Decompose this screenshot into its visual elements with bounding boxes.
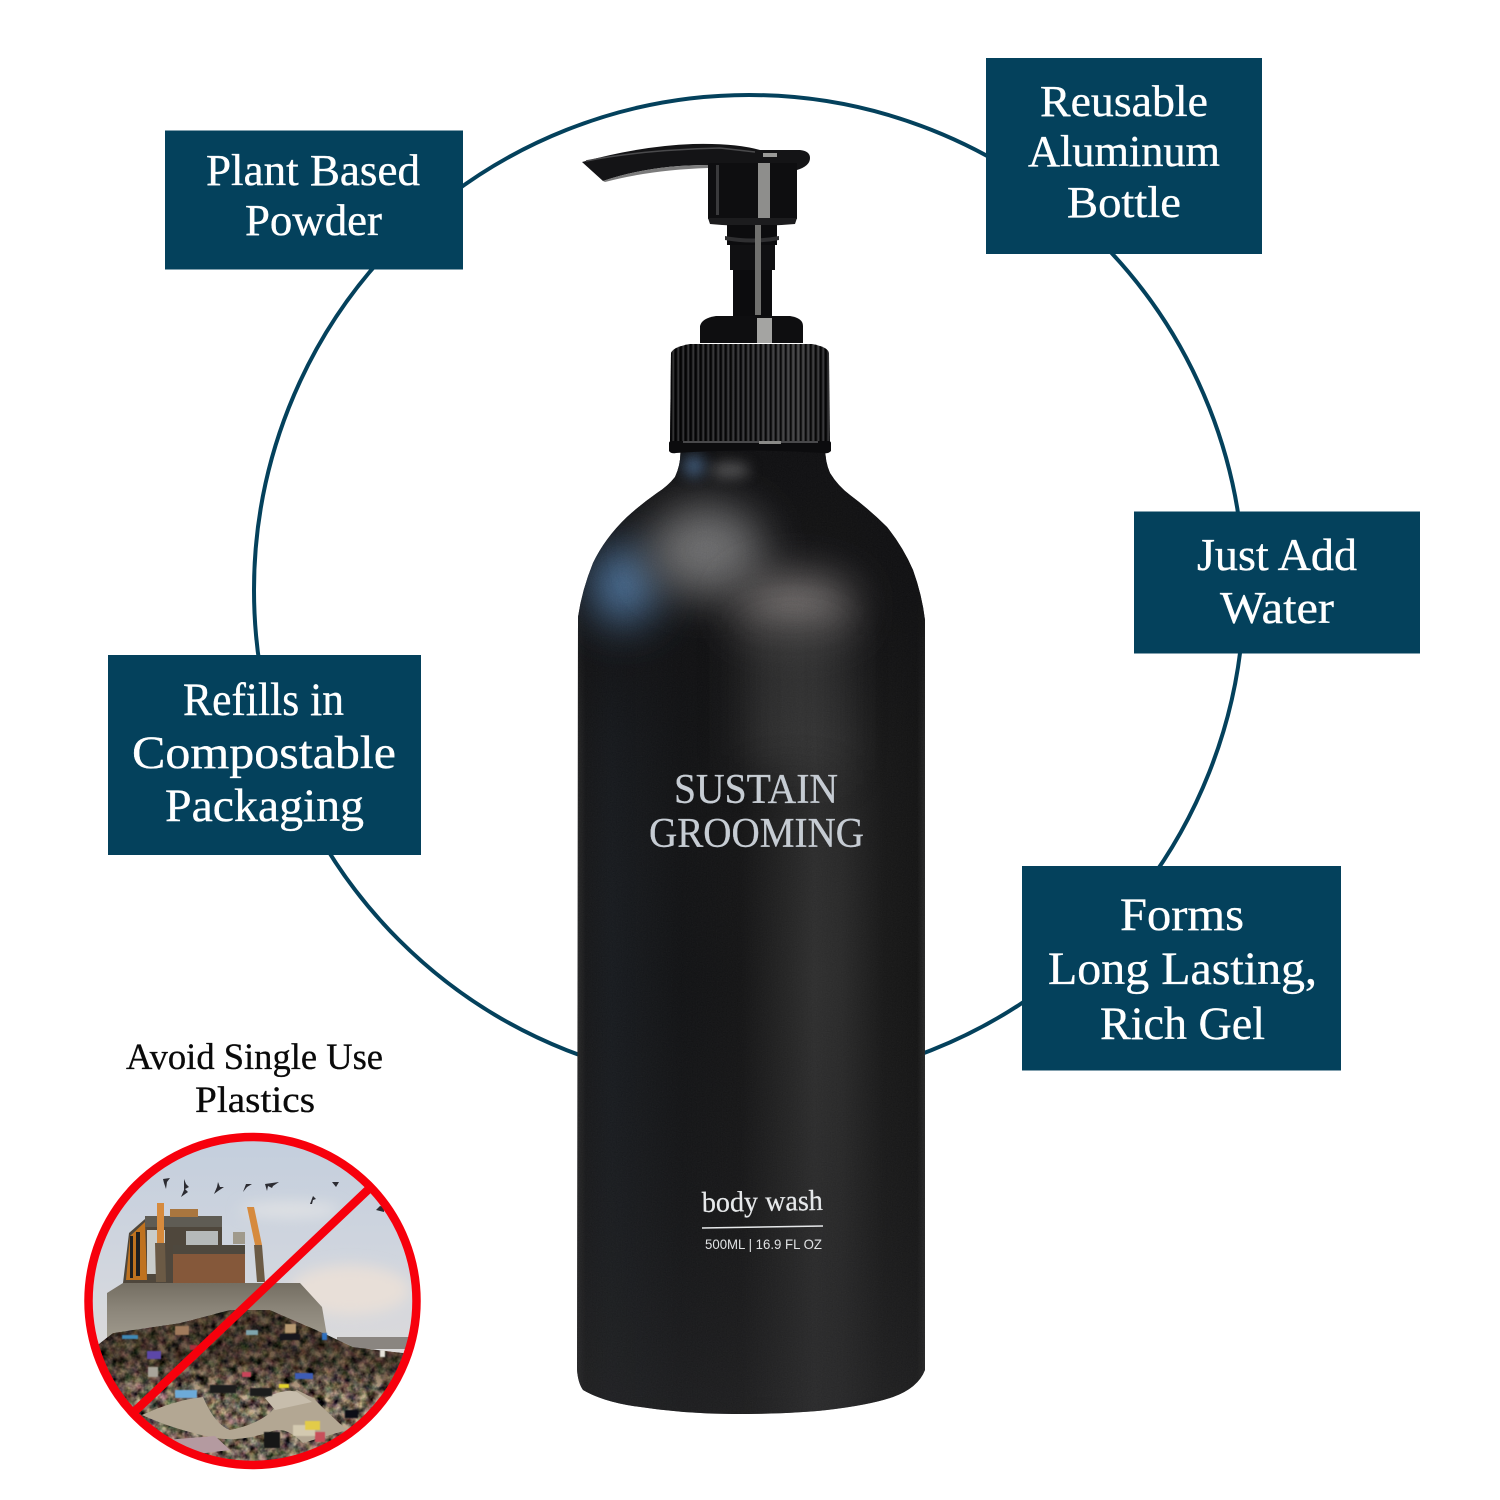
ribbed cap [669, 344, 831, 453]
pump spout and head [582, 144, 810, 226]
callout: plant based powder: Plant Based [206, 146, 420, 195]
red prohibition slash [133, 1185, 373, 1413]
caption: avoid single use plastics: Avoid Single Use [126, 1037, 383, 1078]
product label [702, 1185, 824, 1252]
caption: avoid single use plastics: Plastics [195, 1080, 315, 1121]
callout: reusable aluminum bottle: Reusable [1040, 77, 1208, 126]
callout: reusable aluminum bottle: Bottle [1067, 178, 1181, 227]
callout: just add water: Just Add [1197, 529, 1357, 580]
callout: forms long lasting rich gel: Rich Gel [1100, 998, 1265, 1050]
red prohibition ring [88, 1137, 416, 1465]
feature ring [254, 95, 1244, 1085]
brand name [649, 767, 864, 857]
callout: forms long lasting rich gel: Long Lasting, [1048, 943, 1317, 995]
aluminum bottle body [577, 446, 926, 1416]
callout: forms long lasting rich gel: Forms [1120, 889, 1244, 941]
waste mound [98, 1310, 404, 1461]
product label: 500ML | 16.9 FL OZ [705, 1236, 822, 1252]
brand name: GROOMING [649, 811, 864, 857]
callout: forms long lasting rich gel [1022, 866, 1341, 1070]
callout: plant based powder [165, 130, 463, 270]
landfill photo scene [85, 1135, 421, 1470]
callout: refills in compostable packaging: Packaging [165, 780, 364, 832]
callout: reusable aluminum bottle: Aluminum [1028, 127, 1220, 176]
callout: plant based powder: Powder [245, 196, 382, 245]
brand name: SUSTAIN [674, 767, 838, 813]
callout: just add water [1134, 512, 1420, 654]
callout: reusable aluminum bottle [986, 58, 1262, 254]
callout: refills in compostable packaging: Refills in [183, 674, 344, 726]
callout: just add water: Water [1220, 582, 1334, 633]
caption: avoid single use plastics [126, 1037, 383, 1121]
bulldozer [107, 1203, 327, 1340]
pump stem [725, 225, 779, 316]
pump collar [700, 316, 803, 343]
bottle product photo [577, 144, 926, 1416]
birds [163, 1178, 384, 1212]
product label: body wash [702, 1185, 824, 1219]
callout: refills in compostable packaging: Compostable [132, 727, 396, 779]
callout: refills in compostable packaging [108, 655, 421, 855]
landfill no-symbol icon [85, 1135, 421, 1470]
